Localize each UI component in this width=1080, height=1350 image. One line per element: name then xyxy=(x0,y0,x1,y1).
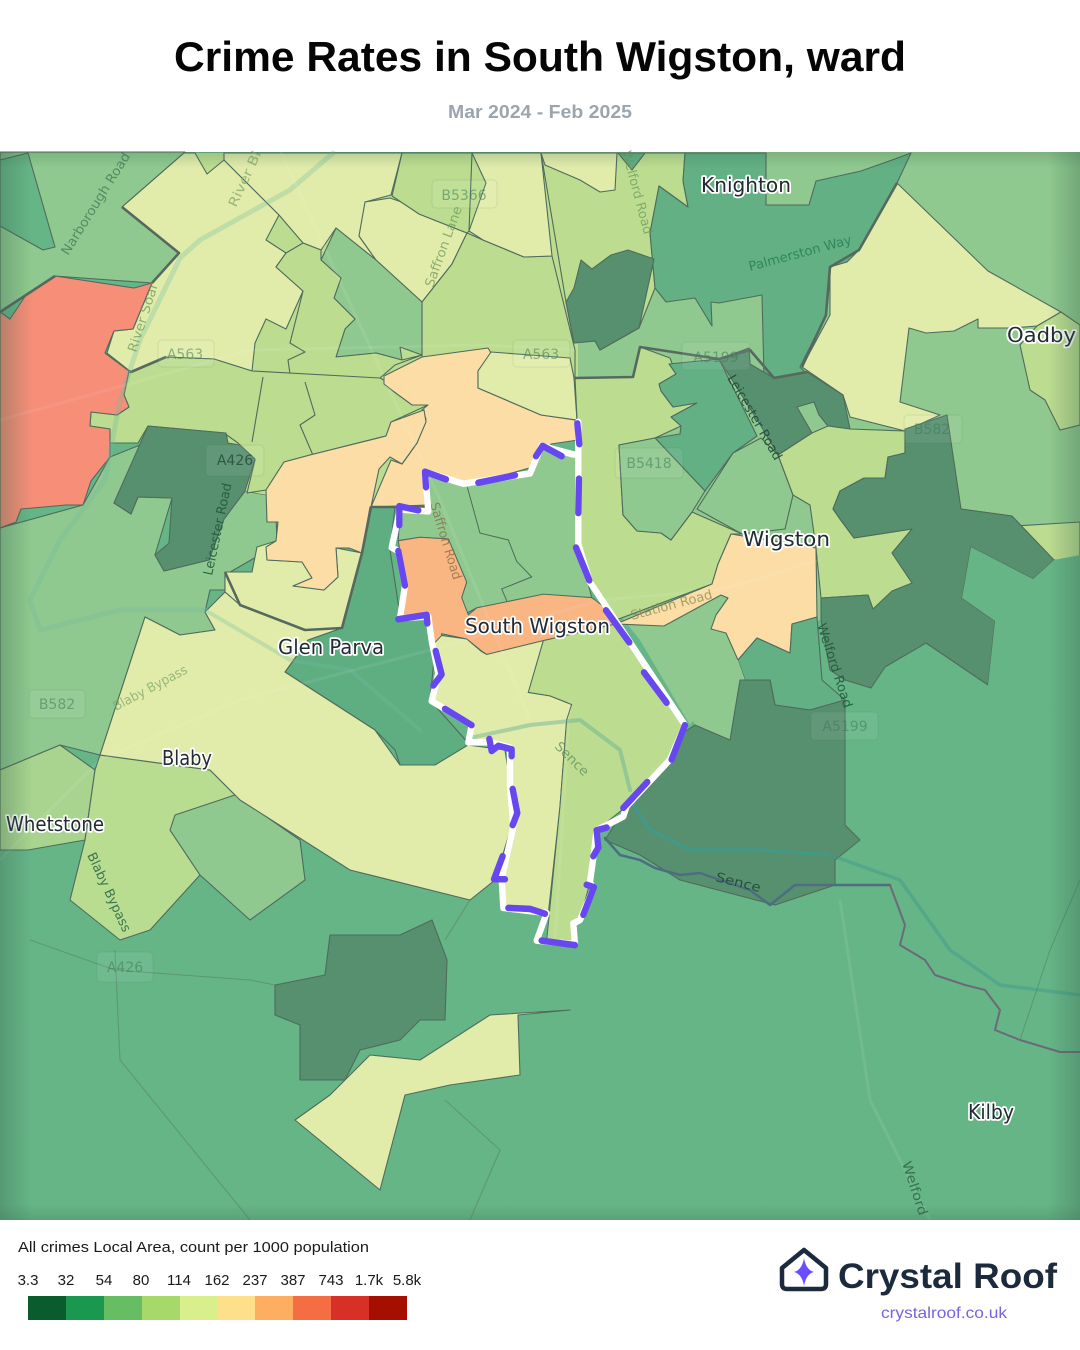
road labels and road number plates: Leicester Road xyxy=(201,482,235,577)
road labels and road number plates: B5366 xyxy=(441,188,487,204)
road labels and road number plates: A563 xyxy=(167,347,203,363)
road labels and road number plates: Blaby Bypass xyxy=(111,663,190,715)
brand logo xyxy=(782,1250,1057,1322)
legend xyxy=(18,1239,422,1320)
place name labels: Kilby xyxy=(968,1100,1014,1124)
place name labels: Wigston xyxy=(743,527,830,551)
legend values: 54 xyxy=(96,1272,112,1289)
legend heading: All crimes Local Area, count per 1000 population xyxy=(18,1239,369,1256)
place name labels: Oadby xyxy=(1007,323,1076,347)
road labels and road number plates: Palmerston Way xyxy=(747,233,854,275)
road labels and road number plates: Saffron Road xyxy=(426,501,464,582)
rivers xyxy=(30,153,1080,1052)
legend colour scale xyxy=(28,1296,407,1320)
road labels and road number plates: Welford Road xyxy=(813,622,855,710)
place name labels: Whetstone xyxy=(6,812,104,836)
place name labels: South Wigston xyxy=(465,614,610,638)
legend values: 162 xyxy=(204,1272,230,1289)
legend values: 387 xyxy=(280,1272,306,1289)
road labels and road number plates xyxy=(29,149,962,1217)
map base area xyxy=(0,152,1080,1220)
legend values: 5.8k xyxy=(393,1272,422,1289)
legend values: 237 xyxy=(242,1272,268,1289)
legend values xyxy=(18,1272,422,1289)
road labels and road number plates: Narborough Road xyxy=(59,150,134,258)
place name labels: Glen Parva xyxy=(278,635,384,659)
choropleth map xyxy=(0,149,1080,1220)
legend values: 80 xyxy=(133,1272,149,1289)
road labels and road number plates: River Bl xyxy=(226,149,265,210)
icon: house with star xyxy=(782,1250,826,1289)
website: crystalroof.co.uk xyxy=(881,1305,1008,1322)
road labels and road number plates: B5418 xyxy=(626,456,672,472)
road labels and road number plates: A5199 xyxy=(693,350,739,366)
legend values: 743 xyxy=(318,1272,344,1289)
thick district boundaries xyxy=(0,183,897,630)
brand name: Crystal Roof xyxy=(838,1257,1057,1296)
legend values: 114 xyxy=(167,1272,191,1289)
road labels and road number plates: Saffron Lane xyxy=(423,204,466,289)
title: Crime Rates in South Wigston, ward xyxy=(174,33,906,80)
road labels and road number plates: A563 xyxy=(523,347,559,363)
neighbourhood polygons xyxy=(0,152,1080,1220)
road labels and road number plates: Leicester Road xyxy=(724,372,785,463)
road labels and road number plates: Station Road xyxy=(629,588,714,624)
road labels and road number plates: A426 xyxy=(217,453,253,469)
road labels and road number plates: B582 xyxy=(39,697,75,713)
road labels and road number plates: Welford Road xyxy=(618,149,655,236)
place name labels xyxy=(6,173,1076,1124)
road labels and road number plates: Blaby Bypass xyxy=(83,850,133,935)
road labels and road number plates: River Soar xyxy=(126,280,162,354)
road labels and road number plates: A426 xyxy=(107,960,143,976)
road labels and road number plates: A5199 xyxy=(822,719,868,735)
ward boundary: white with purple dashes xyxy=(392,422,685,945)
road labels and road number plates: Sence xyxy=(551,739,591,780)
subtitle: date range: Mar 2024 - Feb 2025 xyxy=(448,102,632,122)
map edge vignette xyxy=(0,152,1080,1220)
place name labels: Blaby xyxy=(162,746,212,770)
road labels and road number plates: B582 xyxy=(914,422,950,438)
ward: South Wigston interior areas xyxy=(398,446,685,944)
place name labels: Knighton xyxy=(701,173,791,197)
legend values: 32 xyxy=(58,1272,74,1289)
legend values: 3.3 xyxy=(18,1272,38,1289)
faint road network xyxy=(0,150,930,1220)
road labels and road number plates: Welford xyxy=(898,1160,930,1217)
road labels and road number plates: Sence xyxy=(714,870,762,896)
legend values: 1.7k xyxy=(355,1272,384,1289)
